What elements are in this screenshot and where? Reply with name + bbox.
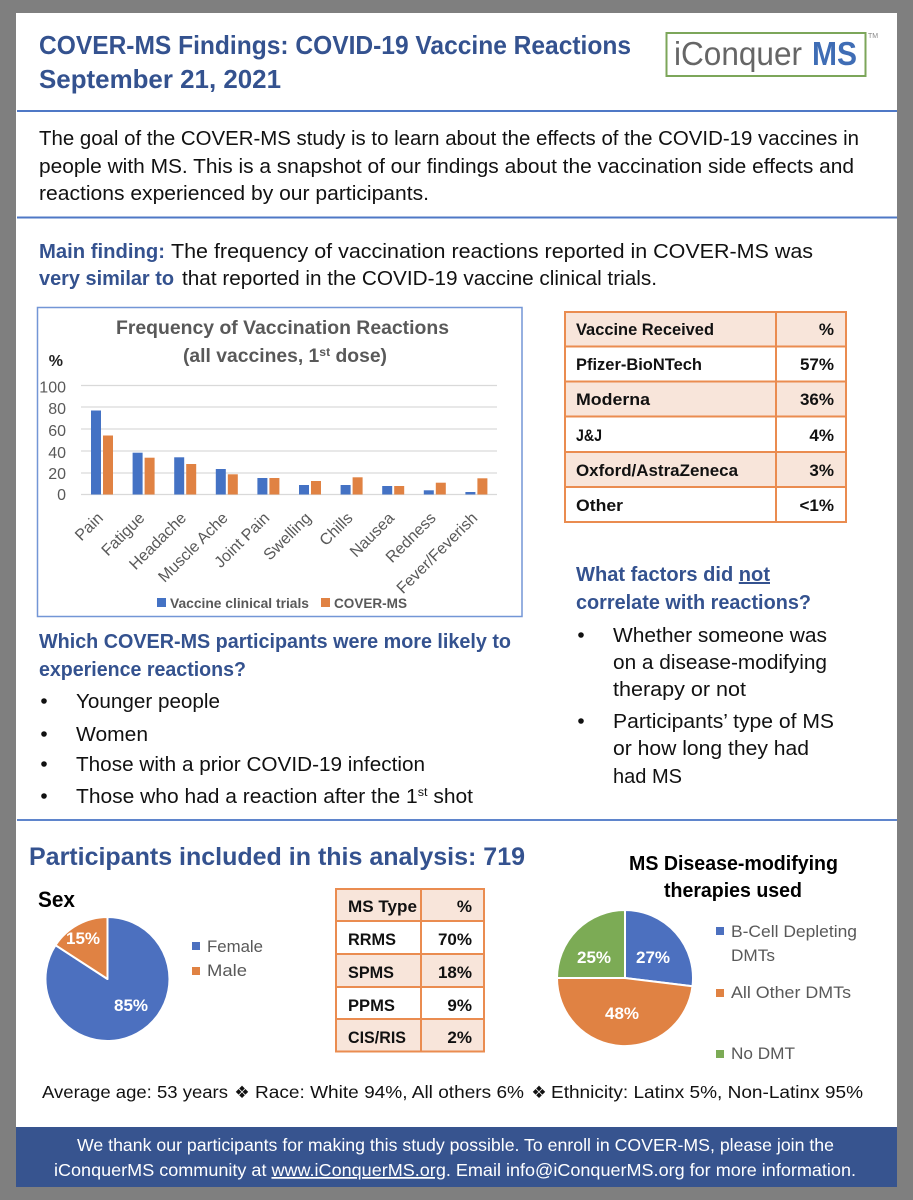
bars: vaccine clinical trials xyxy=(91,410,475,494)
y axis xyxy=(39,353,66,504)
legend: All Other DMTs xyxy=(731,983,851,1002)
table: vaccine received xyxy=(564,311,846,522)
intro text xyxy=(39,128,859,205)
pie chart: disease-modifying therapies: 27% xyxy=(636,948,670,967)
bar chart: frequency of vaccination reactions xyxy=(38,308,522,616)
bullet list: therapy or not xyxy=(613,679,746,701)
table: vaccine received: 57% xyxy=(800,355,834,374)
demographics line: ❖ xyxy=(234,1083,250,1103)
bullet list: Women xyxy=(76,724,148,746)
table: vaccine received: Vaccine Received xyxy=(576,320,714,339)
logo: iConquerMS: TM xyxy=(868,33,878,40)
heading xyxy=(39,631,511,681)
x axis labels: Joint Pain xyxy=(212,510,273,572)
x axis labels: Muscle Ache xyxy=(155,510,232,586)
x axis labels: Fatigue xyxy=(99,510,148,560)
footer banner xyxy=(16,1127,897,1187)
x axis labels: Pain xyxy=(72,510,107,544)
table: vaccine received: <1% xyxy=(800,496,834,515)
chart legend: Vaccine clinical trials xyxy=(170,596,309,611)
intro text: reactions experienced by our participants. xyxy=(39,183,429,205)
table: MS type: PPMS xyxy=(348,996,395,1015)
x axis labels: Chills xyxy=(317,510,356,549)
legend: Female xyxy=(207,937,263,956)
heading: What factors did not xyxy=(576,564,770,586)
bullet list: Whether someone was xyxy=(613,625,827,647)
chart heading: Sex xyxy=(38,887,76,912)
chart title: st xyxy=(319,345,330,359)
heading: correlate with reactions? xyxy=(576,592,811,614)
chart heading xyxy=(629,853,838,902)
table: MS type: CIS/RIS xyxy=(348,1028,406,1047)
x axis labels: Nausea xyxy=(347,510,398,561)
table: MS type: MS Type xyxy=(348,897,417,916)
heading: Which COVER-MS participants were more likely to xyxy=(39,631,511,653)
bullet list: or how long they had xyxy=(613,738,809,760)
table: MS type: % xyxy=(457,897,472,916)
footer banner: iConquerMS community at www.iConquerMS.org . Email info@iConquerMS.org for more information. xyxy=(54,1160,856,1180)
main finding: The frequency of vaccination reactions reported in COVER-MS was xyxy=(171,241,813,263)
table: vaccine received: Moderna xyxy=(576,390,651,409)
pie chart: sex: 15% xyxy=(66,929,100,948)
intro text: The goal of the COVER-MS study is to learn about the effects of the COVID-19 vaccines in xyxy=(39,128,859,150)
demographics line: Ethnicity: Latinx 5%, Non-Latinx 95% xyxy=(551,1082,863,1102)
title: September 21, 2021 xyxy=(39,64,281,94)
bullet list: Those who had a reaction after the 1 xyxy=(76,786,402,808)
table: vaccine received: J&J xyxy=(576,426,602,445)
table: vaccine received: % xyxy=(819,320,834,339)
chart title: (all vaccines, 1 xyxy=(183,346,317,367)
pie chart: sex: 85% xyxy=(114,996,148,1015)
y axis: 100 xyxy=(39,380,66,396)
y axis: 80 xyxy=(48,401,66,418)
demographics line: Race: White 94%, All others 6% xyxy=(255,1082,524,1102)
chart heading: therapies used xyxy=(664,880,802,902)
chart heading: MS Disease-modifying xyxy=(629,853,838,875)
legend: B-Cell Depleting xyxy=(731,922,857,941)
bullet list: Participants’ type of MS xyxy=(613,711,834,733)
chart title xyxy=(116,318,449,367)
factors that did not correlate xyxy=(576,564,834,788)
logo: iConquerMS: MS xyxy=(812,35,857,72)
demographics line: ❖ xyxy=(531,1083,547,1103)
legend: No DMT xyxy=(731,1044,795,1063)
table: MS type: 18% xyxy=(438,963,472,982)
x axis labels: Fever/Feverish xyxy=(394,510,481,597)
bullet list: shot xyxy=(428,786,473,808)
bullet list: had MS xyxy=(613,766,682,788)
main finding: Main finding: xyxy=(39,241,165,263)
bullet list xyxy=(41,691,473,808)
table: vaccine received: Other xyxy=(576,496,623,515)
table: MS type: SPMS xyxy=(348,963,394,982)
heading: experience reactions? xyxy=(39,659,246,681)
x axis labels xyxy=(72,510,481,597)
x axis labels: Headache xyxy=(126,510,190,573)
x axis labels: Redness xyxy=(383,510,440,566)
legend: Male xyxy=(207,961,247,980)
main finding: that reported in the COVID-19 vaccine clinical trials. xyxy=(182,268,657,290)
title: COVER-MS Findings: COVID-19 Vaccine Reactions xyxy=(39,30,631,60)
heading xyxy=(576,564,811,614)
chart title: dose) xyxy=(330,346,387,367)
table: vaccine received: 3% xyxy=(809,461,834,480)
demographics line xyxy=(42,1082,863,1103)
legend xyxy=(192,937,263,980)
y axis: % xyxy=(49,353,63,370)
pie chart: disease-modifying therapies: 25% xyxy=(577,948,611,967)
bullet list: Younger people xyxy=(76,691,220,713)
footer banner: We thank our participants for making this study possible. To enroll in COVER-MS, please join the xyxy=(77,1135,834,1155)
bullet list xyxy=(578,625,834,788)
header xyxy=(39,30,878,94)
chart legend: COVER-MS xyxy=(334,596,407,611)
chart legend xyxy=(157,596,407,611)
bullet list: on a disease-modifying xyxy=(613,652,827,674)
y axis: 0 xyxy=(57,487,66,504)
logo: iConquerMS xyxy=(666,33,878,76)
title xyxy=(39,30,631,94)
pie chart: disease-modifying therapies: 48% xyxy=(605,1004,639,1023)
table: vaccine received: 4% xyxy=(809,426,834,445)
y axis: 40 xyxy=(48,445,66,462)
demographics line: Average age: 53 years xyxy=(42,1082,228,1102)
x axis labels: Swelling xyxy=(261,510,315,564)
table: MS type: RRMS xyxy=(348,930,396,949)
pie chart: sex xyxy=(38,887,263,1041)
bullet list: Those with a prior COVID-19 infection xyxy=(76,754,425,776)
table: MS type: 70% xyxy=(438,930,472,949)
intro text: people with MS. This is a snapshot of our findings about the vaccination side effects and xyxy=(39,156,854,178)
table: MS type: 2% xyxy=(447,1028,472,1047)
legend xyxy=(716,922,857,1063)
participants heading: Participants included in this analysis: 719 xyxy=(29,843,525,871)
logo: iConquerMS: iConquer xyxy=(674,35,802,72)
table: MS type xyxy=(335,888,484,1052)
legend: DMTs xyxy=(731,946,775,965)
table: vaccine received: 36% xyxy=(800,390,834,409)
table: vaccine received: Pfizer-BioNTech xyxy=(576,355,702,374)
who was more likely to react xyxy=(39,631,511,808)
main finding xyxy=(39,241,813,290)
bars: COVER-MS xyxy=(103,436,487,494)
chart title: Frequency of Vaccination Reactions xyxy=(116,318,449,339)
pie chart: disease-modifying therapies xyxy=(557,853,857,1063)
table: vaccine received: Oxford/AstraZeneca xyxy=(576,461,739,480)
main finding: very similar to xyxy=(39,268,174,290)
y axis: 60 xyxy=(48,423,66,440)
table: MS type: 9% xyxy=(447,996,472,1015)
bullet list: st xyxy=(418,785,428,799)
y axis: 20 xyxy=(48,466,66,483)
